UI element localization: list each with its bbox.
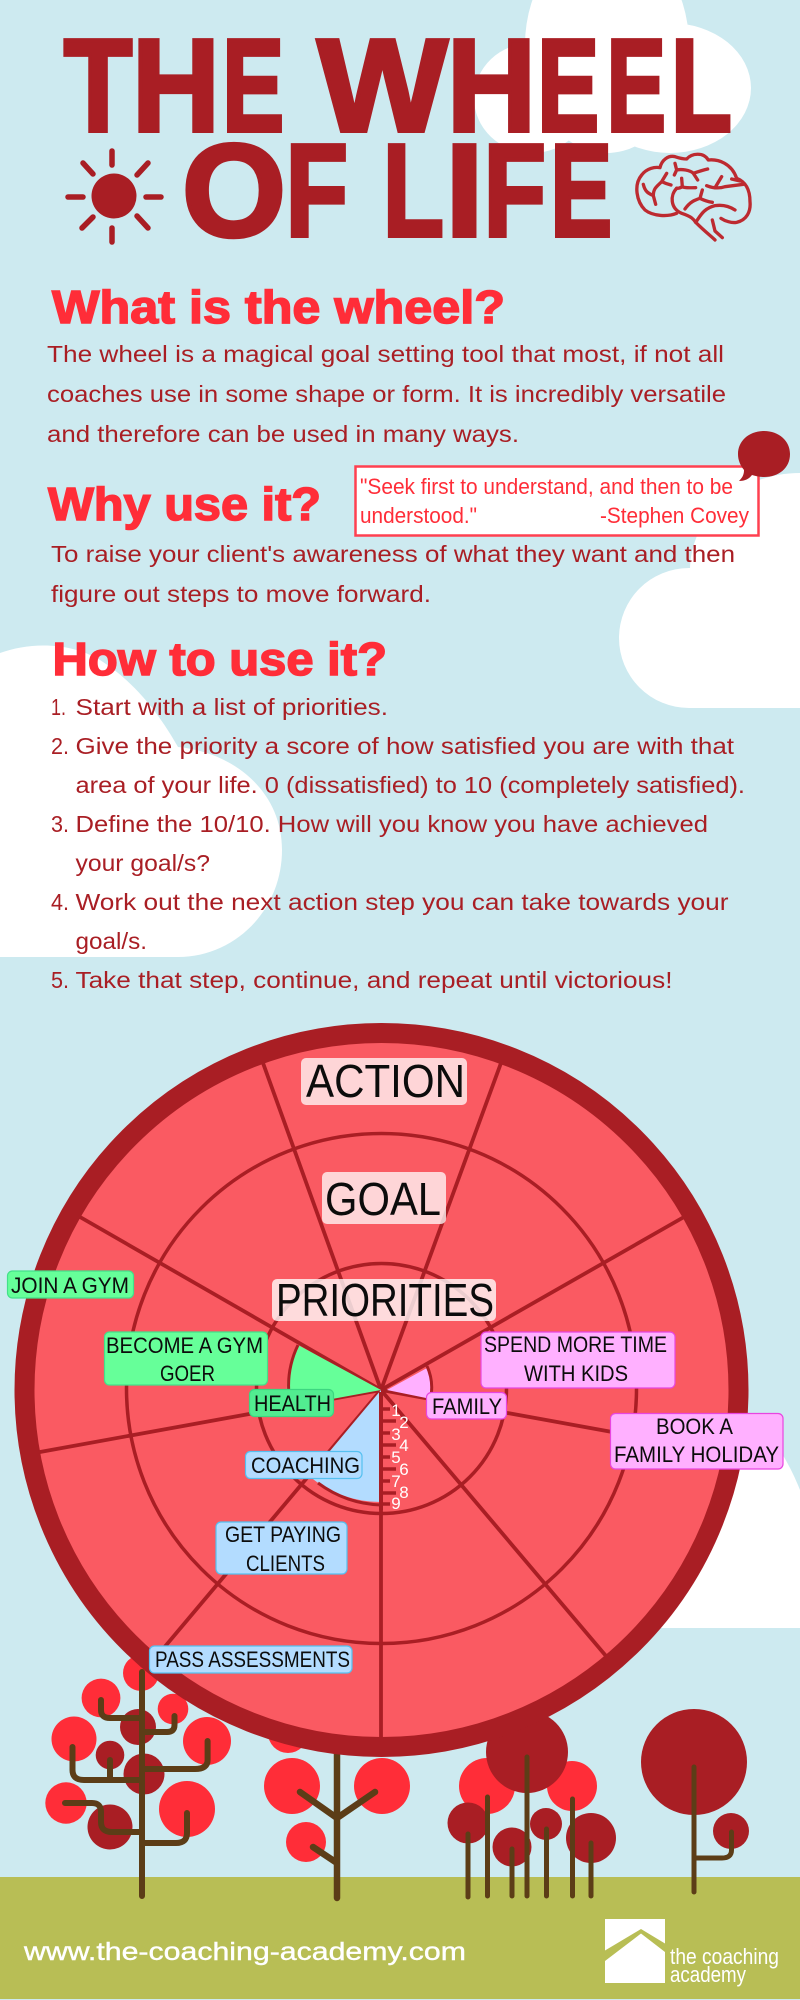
- tree: right: [641, 1709, 749, 1892]
- list: steps: 5.: [51, 967, 69, 993]
- label: coaching: COACHING: [251, 1453, 360, 1478]
- list: steps: [51, 694, 745, 993]
- title: E: [222, 12, 284, 159]
- title: L: [383, 117, 444, 264]
- score scale: 3: [391, 1425, 401, 1444]
- wheel of life chart: [24, 1033, 738, 1747]
- list: steps: Work out the next action step you can take towards your: [76, 889, 729, 915]
- logo: the coaching academy: academy: [670, 1962, 746, 1987]
- score scale: 7: [391, 1472, 401, 1491]
- label: priorities: PRIORITIES: [276, 1274, 494, 1326]
- text: what is the wheel: The wheel is a magical goal setting tool that most, if not all: [47, 341, 724, 367]
- ground: [0, 1877, 800, 1999]
- list: steps: Start with a list of priorities.: [76, 694, 388, 720]
- list: steps: 1.: [51, 694, 66, 720]
- cloud: lower right: [640, 1435, 800, 1628]
- label: goal: GOAL: [325, 1173, 441, 1225]
- wedge: health: [287, 1345, 381, 1407]
- score scale: 9: [391, 1494, 401, 1513]
- label: get paying clients: [216, 1522, 347, 1576]
- score scale: 5: [391, 1448, 401, 1467]
- list: steps: 3.: [51, 811, 69, 837]
- title: F: [286, 117, 348, 264]
- title: H: [447, 12, 536, 159]
- text: what is the wheel: and therefore can be used in many ways.: [47, 421, 519, 447]
- title: T: [64, 12, 132, 159]
- tree: left: [45, 1655, 231, 1896]
- text: why use it: To raise your client's awareness of what they want and then: [51, 541, 735, 567]
- score scale: 8: [399, 1483, 409, 1502]
- cloud: top right: [474, 0, 751, 153]
- icon: brain: [637, 154, 750, 240]
- tree: second: [264, 1713, 410, 1898]
- score scale: 2: [399, 1413, 409, 1432]
- list: steps: Define the 10/10. How will you know you have achieved: [76, 811, 708, 837]
- title: H: [132, 12, 220, 159]
- list: steps: Take that step, continue, and repeat until victorious!: [76, 967, 672, 993]
- label: become a gym goer: [104, 1332, 268, 1386]
- heading: what is the wheel: What is the wheel?: [52, 281, 505, 333]
- list: steps: 2.: [51, 733, 69, 759]
- list: steps: 4.: [51, 889, 69, 915]
- title: E: [537, 12, 599, 159]
- label: action: ACTION: [306, 1055, 465, 1107]
- title: L: [671, 12, 732, 159]
- text: what is the wheel: [47, 341, 726, 447]
- wheel spokes: [40, 1063, 722, 1737]
- label: become a gym goer: BECOME A GYM: [106, 1333, 263, 1358]
- title: F: [484, 117, 546, 264]
- cloud: middle right: [619, 473, 800, 708]
- icon: speech bubble: [738, 431, 790, 481]
- score scale: 6: [399, 1460, 409, 1479]
- footer url: www.the-coaching-academy.com: [23, 1938, 466, 1966]
- wedge: family: [387, 1368, 432, 1399]
- heading: how to use it: How to use it?: [52, 633, 387, 685]
- text: why use it: [51, 541, 735, 607]
- title: [64, 12, 732, 264]
- wheel rings: [126, 1134, 636, 1644]
- quote box: [356, 466, 758, 536]
- wedge outlines: [289, 1345, 432, 1505]
- label: get paying clients: GET PAYING: [225, 1522, 341, 1547]
- title: E: [550, 117, 612, 264]
- cloud: middle left: [0, 645, 282, 957]
- score scale: [381, 1392, 409, 1513]
- list: steps: Give the priority a score of how satisfied you are with that: [76, 733, 735, 759]
- logo: the coaching academy: the coaching: [670, 1944, 779, 1969]
- title: W: [317, 12, 448, 159]
- label: become a gym goer: GOER: [160, 1361, 215, 1386]
- label: pass assessments: PASS ASSESSMENTS: [155, 1647, 350, 1672]
- label: join a gym: JOIN A GYM: [11, 1273, 129, 1298]
- wedge: coaching: [309, 1390, 381, 1502]
- quote box: -Stephen Covey: [600, 503, 749, 528]
- label: book a family holiday: BOOK A: [656, 1414, 733, 1439]
- label: book a family holiday: FAMILY HOLIDAY: [614, 1442, 779, 1467]
- label: spend more time with kids: SPEND MORE TIME: [484, 1332, 667, 1357]
- icon: sun: [68, 151, 161, 242]
- label: spend more time with kids: [481, 1332, 675, 1388]
- list: steps: goal/s.: [76, 928, 147, 954]
- score scale: 1: [391, 1401, 401, 1420]
- label: health: HEALTH: [254, 1391, 331, 1416]
- label: get paying clients: CLIENTS: [246, 1551, 325, 1576]
- title: E: [606, 12, 666, 159]
- label: spend more time with kids: WITH KIDS: [524, 1361, 628, 1386]
- title: O: [182, 117, 286, 264]
- list: steps: area of your life. 0 (dissatisfied) to 10 (completely satisfied).: [76, 772, 745, 798]
- quote box: understood.": [360, 503, 477, 528]
- text: why use it: figure out steps to move forward.: [51, 581, 431, 607]
- logo: the coaching academy: [605, 1919, 779, 1987]
- label: family: FAMILY: [432, 1394, 502, 1419]
- quote box: "Seek first to understand, and then to be: [360, 474, 733, 499]
- title: I: [445, 117, 484, 264]
- label: book a family holiday: [610, 1414, 783, 1469]
- text: what is the wheel: coaches use in some shape or form. It is incredibly versatile: [47, 381, 726, 407]
- list: steps: your goal/s?: [76, 850, 210, 876]
- heading: why use it: Why use it?: [48, 478, 321, 530]
- score scale: 4: [399, 1436, 409, 1455]
- tree: cluster: [448, 1711, 616, 1897]
